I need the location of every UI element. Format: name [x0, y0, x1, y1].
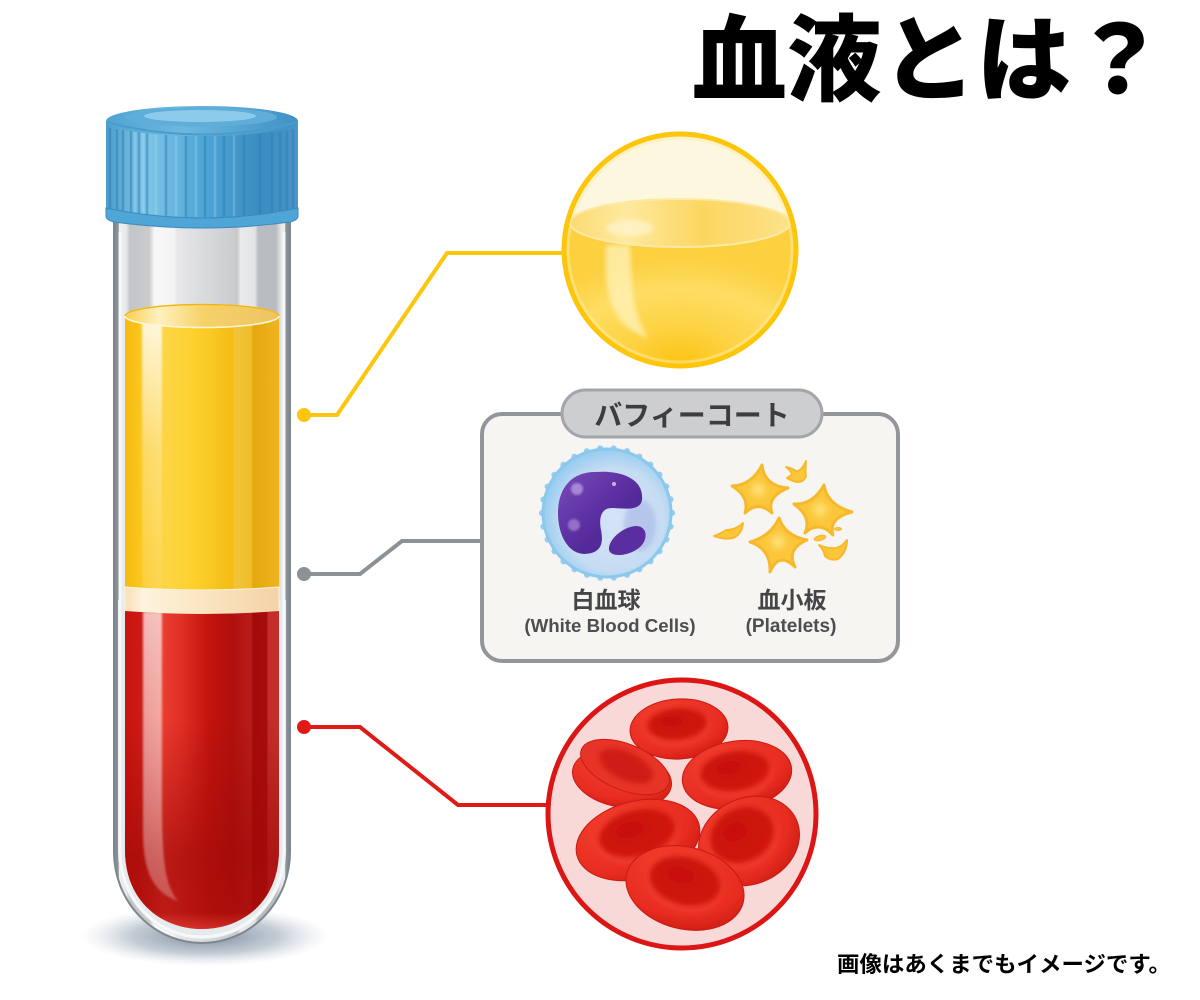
title: 血液とは？	[692, 8, 1166, 113]
panel box	[482, 414, 898, 661]
label: platelets: 血小板	[758, 587, 826, 613]
connector: plasma	[298, 253, 565, 421]
test tube	[80, 106, 330, 966]
label: platelets	[746, 587, 836, 637]
connector: red blood cells	[298, 721, 552, 805]
label: white blood cells	[524, 587, 696, 636]
red cell top	[628, 696, 730, 762]
red cell bottom	[617, 834, 753, 942]
red cell lower left	[567, 787, 709, 893]
red blood cell layer	[125, 611, 279, 929]
footnote: 画像はあくまでもイメージです。	[837, 952, 1171, 977]
panel: red blood cells circle	[548, 680, 816, 948]
icon: platelets	[714, 461, 852, 572]
red cell right	[678, 734, 796, 816]
panel heading	[562, 390, 822, 437]
label: white blood cells: 白血球	[572, 587, 640, 613]
panel heading: バフィーコート	[594, 400, 790, 431]
label: white blood cells: (White Blood Cells)	[524, 615, 696, 636]
tube shadow	[80, 906, 330, 966]
panel: plasma circle	[560, 134, 800, 373]
red cell overlapping pair	[568, 728, 677, 815]
glass tube	[114, 218, 290, 943]
red cell lower right	[684, 780, 814, 902]
blue cap	[106, 106, 298, 228]
plasma layer	[125, 304, 279, 590]
label: platelets: (Platelets)	[746, 616, 836, 637]
buffy coat layer	[125, 587, 279, 615]
connector: buffy coat	[298, 541, 484, 580]
icon: white blood cell	[542, 448, 672, 578]
panel: buffy coat	[482, 390, 898, 661]
